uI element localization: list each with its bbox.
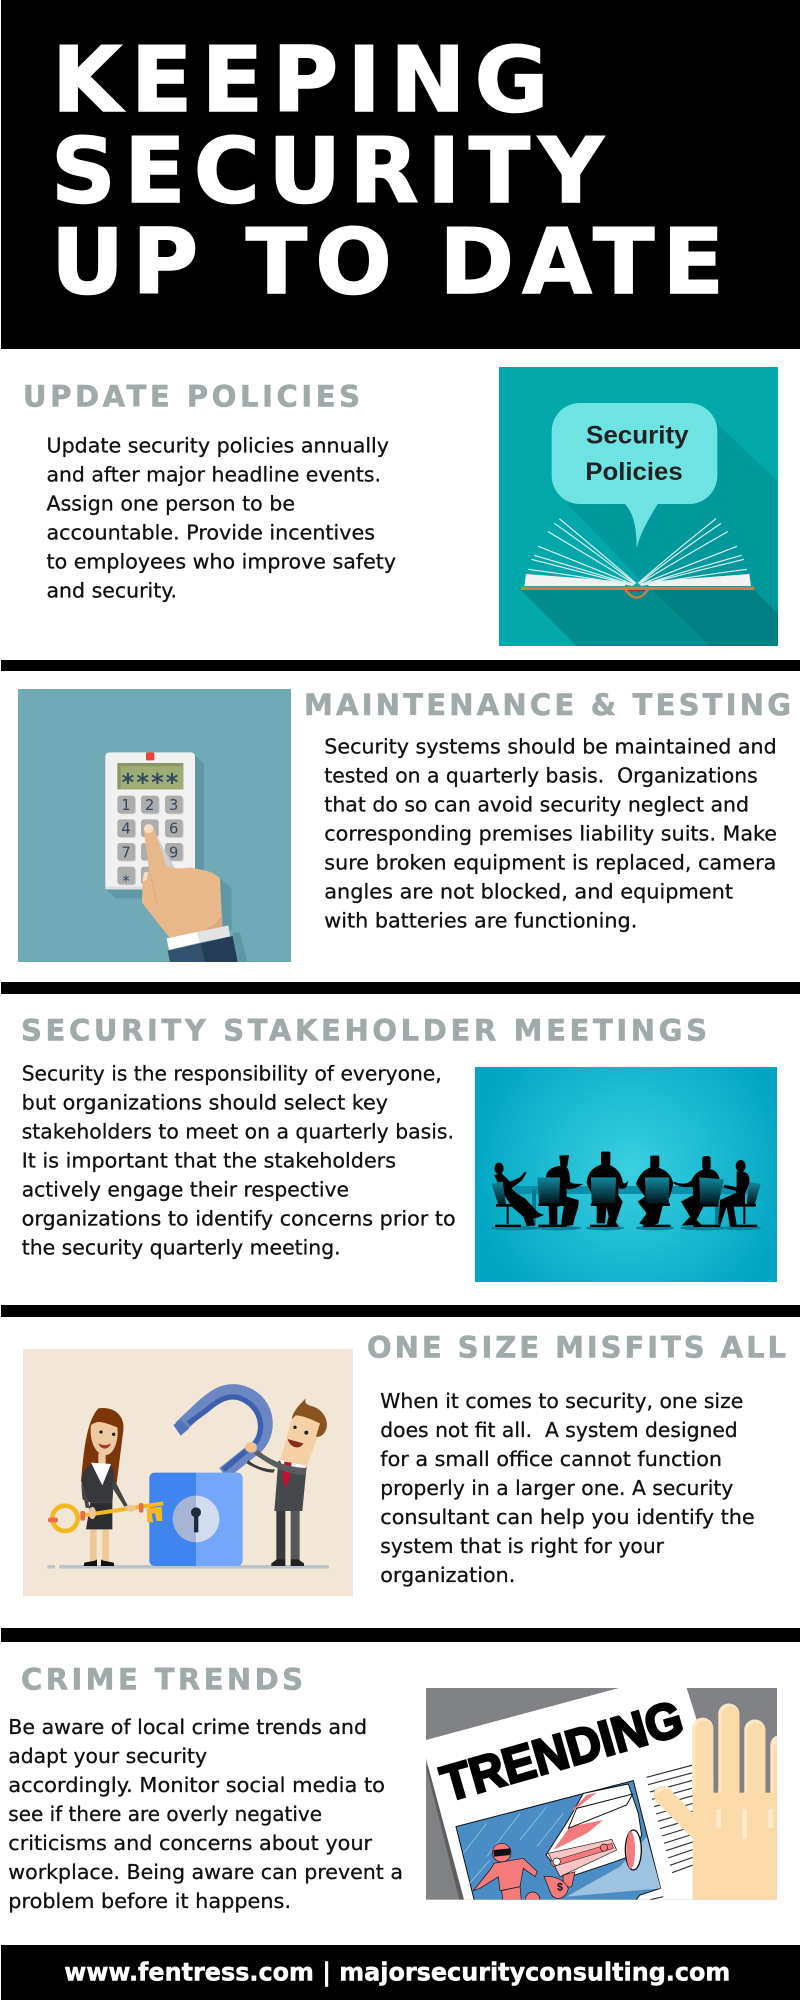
- person 3: [587, 1152, 628, 1227]
- divider bar: [1, 1628, 800, 1642]
- person 1: [492, 1163, 544, 1227]
- text block: one size misfits all: for a small office cannot function: [380, 1447, 722, 1471]
- title banner: KEEPING: [52, 28, 548, 133]
- person 6: [718, 1160, 761, 1227]
- text block: update policies: Update security policies annually: [46, 434, 389, 458]
- text block: update policies: and after major headline events.: [46, 463, 381, 487]
- text block: one size misfits all: organization.: [380, 1563, 515, 1587]
- panel: crime trends: [8, 1662, 790, 1913]
- keypad: 9: [169, 844, 178, 861]
- text block: crime trends: problem before it happens.: [8, 1889, 291, 1913]
- illustration: business people unlocking padlock: [23, 1349, 353, 1596]
- ground line: [47, 1565, 329, 1569]
- text block: one size misfits all: When it comes to security, one size: [380, 1389, 743, 1413]
- text block: update policies: and security.: [46, 579, 177, 603]
- speech bubble: Security: [586, 422, 689, 449]
- illustration: open book with speech bubble: [499, 367, 778, 646]
- text block: maintenance and testing: angles are not blocked, and equipment: [324, 879, 733, 903]
- panel: security stakeholder meetings: [21, 1014, 777, 1282]
- text block: maintenance and testing: corresponding premises liability suits. Make: [324, 821, 777, 845]
- keypad: 1: [121, 797, 131, 814]
- divider bar: [1, 1305, 800, 1317]
- keypad: 2: [145, 797, 154, 814]
- text block: maintenance and testing: sure broken equipment is replaced, camera: [324, 850, 776, 874]
- speech bubble: Policies: [585, 459, 683, 486]
- text block: security stakeholder meetings: [22, 1062, 456, 1260]
- heading: one size misfits all: ONE SIZE MISFITS ALL: [367, 1331, 786, 1365]
- text block: maintenance and testing: tested on a quarterly basis. Organizations: [324, 763, 758, 787]
- hand: [142, 824, 222, 938]
- illustration: boardroom silhouettes: [475, 1067, 777, 1282]
- keypad: *: [122, 873, 130, 890]
- text block: crime trends: [8, 1715, 403, 1913]
- text block: one size misfits all: properly in a larger one. A security: [380, 1476, 733, 1500]
- text block: crime trends: see if there are overly negative: [8, 1802, 322, 1826]
- robber: [492, 1843, 511, 1862]
- heading: security stakeholder meetings: SECURITY STAKEHOLDER MEETINGS: [21, 1014, 707, 1048]
- keypad: ****: [122, 768, 179, 796]
- heading: crime trends: CRIME TRENDS: [21, 1662, 303, 1696]
- newspaper: TRENDING: [435, 1690, 689, 1812]
- text block: update policies: Assign one person to be: [46, 492, 295, 516]
- keypad: 4: [121, 821, 131, 838]
- padlock: [149, 1391, 266, 1566]
- shirt cuff and sleeve: [167, 925, 238, 962]
- newspaper picture: robber and getaway car: $: [557, 1882, 563, 1894]
- gaps between fingers: [714, 1774, 718, 1793]
- panel: one size misfits all: [23, 1331, 786, 1596]
- person 4: [636, 1156, 673, 1227]
- car: [546, 1784, 642, 1878]
- newspaper picture: robber and getaway car: [456, 1781, 661, 1908]
- footer bar: www.fentress.com | majorsecurityconsulting.com: [64, 1958, 730, 1987]
- key: [48, 1503, 163, 1531]
- text block: security stakeholder meetings: It is important that the stakeholders: [22, 1149, 396, 1173]
- text block: security stakeholder meetings: actively engage their respective: [22, 1178, 349, 1202]
- text block: maintenance and testing: Security systems should be maintained and: [324, 734, 777, 758]
- illustration: keypad and hand: [18, 689, 291, 962]
- text block: maintenance and testing: that do so can avoid security neglect and: [324, 792, 749, 816]
- text block: security stakeholder meetings: but organizations should select key: [22, 1091, 388, 1115]
- text block: crime trends: accordingly. Monitor social media to: [8, 1773, 385, 1797]
- keypad: [105, 752, 195, 890]
- meeting table: [513, 1186, 750, 1225]
- divider bar: [1, 982, 800, 994]
- woman: [81, 1408, 128, 1566]
- text block: one size misfits all: system that is right for your: [380, 1534, 665, 1558]
- keypad: 3: [169, 797, 178, 814]
- footer bar: [1, 1945, 800, 2000]
- text block: update policies: [46, 434, 396, 603]
- speech bubble: [552, 403, 717, 548]
- panel: maintenance and testing: [18, 688, 791, 962]
- text block: crime trends: Be aware of local crime trends and: [8, 1715, 367, 1739]
- title banner: UP TO DATE: [51, 210, 724, 315]
- text block: security stakeholder meetings: stakeholders to meet on a quarterly basis.: [22, 1120, 454, 1144]
- text block: maintenance and testing: with batteries are functioning.: [324, 908, 637, 932]
- text block: one size misfits all: does not fit all. A system designed: [380, 1418, 738, 1442]
- hand: [654, 1704, 790, 1901]
- divider bar: [1, 660, 800, 671]
- newspaper: [426, 1688, 718, 1900]
- illustration: trending newspaper and hand: [426, 1688, 790, 1908]
- heading: update policies: UPDATE POLICIES: [23, 380, 360, 414]
- text block: security stakeholder meetings: the security quarterly meeting.: [22, 1236, 341, 1260]
- text block: update policies: accountable. Provide incentives: [46, 521, 375, 545]
- text block: security stakeholder meetings: Security is the responsibility of everyone,: [22, 1062, 442, 1086]
- heading: maintenance and testing: MAINTENANCE & TESTING: [304, 688, 791, 722]
- text block: one size misfits all: [380, 1389, 755, 1587]
- text block: crime trends: adapt your security: [8, 1744, 207, 1768]
- title banner: SECURITY: [51, 119, 605, 224]
- book: [521, 519, 754, 598]
- text block: crime trends: workplace. Being aware can prevent a: [8, 1860, 403, 1884]
- man: [245, 1398, 327, 1566]
- text block: crime trends: criticisms and concerns about your: [8, 1831, 373, 1855]
- panel: update policies: [23, 367, 778, 646]
- text block: one size misfits all: consultant can help you identify the: [380, 1505, 755, 1529]
- text block: maintenance and testing: [324, 734, 777, 932]
- keypad: 7: [121, 844, 131, 861]
- text block: update policies: to employees who improve safety: [46, 550, 396, 574]
- title banner: [1, 0, 800, 349]
- text block: security stakeholder meetings: organizations to identify concerns prior to: [22, 1207, 456, 1231]
- person 2: [537, 1155, 583, 1227]
- person 5: [673, 1156, 724, 1227]
- keypad: 6: [169, 821, 178, 838]
